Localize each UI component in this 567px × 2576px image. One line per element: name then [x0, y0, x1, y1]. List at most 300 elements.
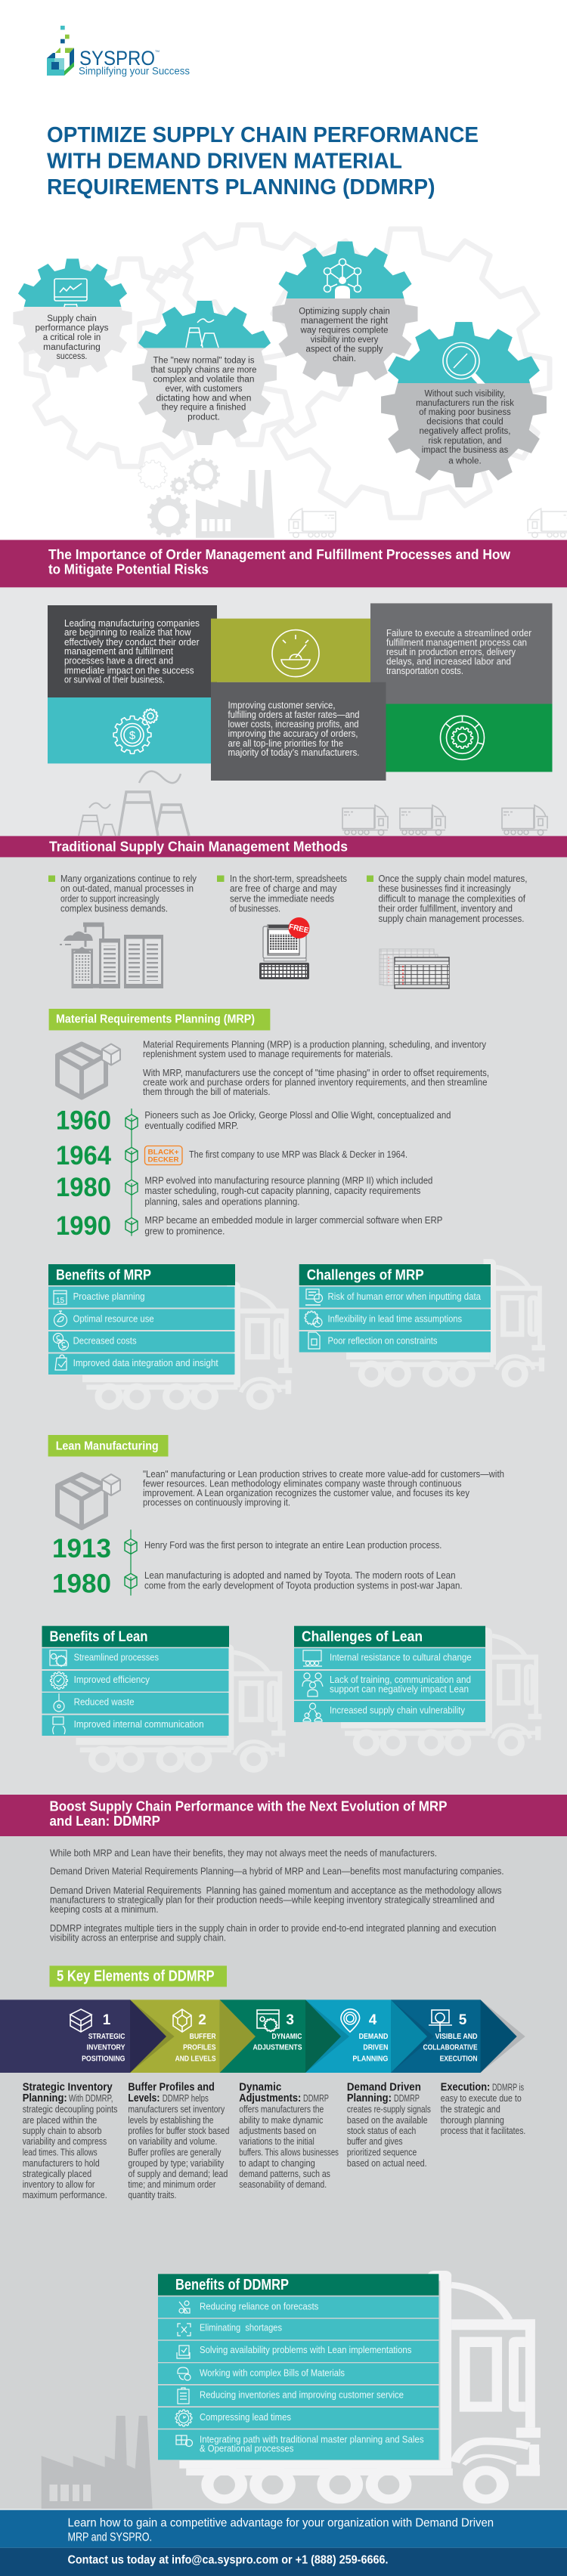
panel: benefits of lean	[42, 1626, 229, 1736]
icon: computer with free badge	[259, 917, 310, 979]
rows: Proactive planning	[73, 1291, 145, 1302]
bullet column 3: difficult to manage the complexities of	[378, 893, 525, 904]
column: dynamic adjustments: offers manufacturers the	[239, 2104, 324, 2115]
step 2	[173, 2009, 216, 2063]
gear 1 text: Supply chain	[47, 314, 97, 323]
title: REQUIREMENTS PLANNING (DDMRP)	[47, 175, 435, 199]
gear 3 text: aspect of the supply	[305, 345, 383, 354]
timeline text: eventually codified MRP.	[144, 1121, 238, 1131]
column: strategic inventory planning: lead times. This allows	[23, 2148, 98, 2158]
order card 1 text	[64, 618, 200, 685]
column: dynamic adjustments: Dynamic	[239, 2080, 281, 2093]
gear 3 text: management the right	[301, 317, 389, 326]
column: dynamic adjustments: to adapt to changing	[239, 2158, 315, 2169]
icon: monitor with chart	[54, 279, 87, 307]
rows: Poor reflection on constraints	[328, 1335, 437, 1346]
MRP description: replenishment system used to manage requirements for materials.	[143, 1049, 393, 1059]
timeline text: Lean manufacturing is adopted and named by Toyota. The modern roots of Lean	[144, 1570, 456, 1581]
column: demand driven planning: based on the available	[347, 2115, 428, 2126]
column: demand driven planning: Planning:	[347, 2092, 392, 2104]
gear 2 text: dictating how and when	[156, 394, 251, 403]
icon: x in frame	[178, 2324, 191, 2336]
DDMRP introduction: Demand Driven Material Requirements Planning has gained momentum and acceptance as the methodology allows	[50, 1885, 502, 1896]
order card 3 text: fulfillment management process can	[386, 638, 527, 648]
icon: calendar: 15	[56, 1297, 64, 1305]
step 4: 4	[369, 2012, 377, 2028]
column: buffer profiles and levels: of supply and demand; lead	[128, 2169, 228, 2179]
icon: dollar gear	[113, 709, 157, 753]
logo: black and decker: DECKER	[148, 1156, 179, 1164]
order card 1 text: immediate impact on the success	[64, 665, 194, 676]
DDMRP introduction: manufacturers to strategically plan for their production needs—while keeping inventory strategically streamlined and	[50, 1895, 494, 1906]
DDMRP introduction: While both MRP and Lean have their benefits, they may not always meet the needs of manufacturers.	[50, 1848, 437, 1858]
step 3: ADJUSTMENTS	[253, 2043, 302, 2052]
gear 3 text: way requires complete	[299, 326, 389, 335]
icon: gauge	[272, 630, 319, 677]
truck backgrounds: lean	[76, 1628, 541, 1770]
order card 1 text: Leading manufacturing companies	[64, 618, 200, 629]
bullet column 3: these businesses find it increasingly	[378, 883, 511, 894]
label: lean manufacturing: Lean Manufacturing	[56, 1440, 159, 1452]
rows	[42, 1648, 228, 1736]
column: execution: process that it facilitates.	[441, 2126, 525, 2136]
column: dynamic adjustments: demand patterns, such as	[239, 2169, 330, 2179]
step 3	[253, 2010, 302, 2052]
MRP description: Material Requirements Planning (MRP) is a production planning, scheduling, and inventory	[143, 1040, 487, 1050]
panel: order card 1	[48, 605, 217, 763]
panel: benefits of lean: Benefits of Lean	[50, 1629, 148, 1645]
icon: clipboard check	[55, 1355, 67, 1370]
column: strategic inventory planning: strategic decoupling points	[23, 2104, 118, 2115]
icon: forecast scissors	[179, 2301, 190, 2313]
column: demand driven planning: stock status of each	[347, 2126, 416, 2136]
badge: free: FREE	[288, 923, 310, 935]
rows: Optimal resource use	[73, 1313, 154, 1324]
rows: Improved internal communication	[74, 1719, 204, 1730]
heading band: traditional methods: Traditional Supply Chain Management Methods	[49, 840, 348, 855]
rows: Decreased costs	[73, 1335, 137, 1346]
lean description: improvement. A Lean organization recognizes the customer value, and focuses its key	[143, 1488, 470, 1498]
icon: document	[308, 1332, 320, 1349]
gear 1 text: success.	[57, 352, 87, 361]
logo: SYSPRO: SYSPRO	[79, 47, 155, 70]
order card 2 text: majority of today’s manufacturers.	[228, 747, 360, 758]
gear 3 text: Optimizing supply chain	[299, 307, 390, 316]
gear 2 text: The "new normal" today is	[153, 356, 255, 365]
gear 2 text: they require a finished	[162, 404, 246, 413]
gear 3 text	[299, 307, 390, 363]
icon: efficiency badge	[51, 1672, 67, 1689]
rows: Reducing reliance on forecasts	[200, 2301, 318, 2312]
icon: inbox check	[177, 2346, 190, 2358]
background gears and factory	[26, 225, 567, 538]
step 4: DEMAND	[359, 2032, 389, 2041]
gear 4 text: negatively affect profits,	[419, 427, 511, 436]
order card 3 text: Failure to execute a streamlined order	[386, 628, 531, 639]
icon: error report	[305, 1289, 322, 1305]
factory background	[42, 2416, 153, 2509]
column: execution: thorough planning	[441, 2115, 504, 2126]
rows: Integrating path with traditional master planning and Sales	[200, 2434, 424, 2445]
gear 1: supply chain performance	[13, 258, 132, 378]
bullet column 3: their order fulfillment, inventory and	[378, 904, 513, 914]
column: strategic inventory planning: maximum performance.	[23, 2190, 107, 2200]
column: execution: the strategic and	[441, 2104, 500, 2115]
bullet column 1: Many organizations continue to rely	[60, 874, 197, 884]
timeline text: come from the early development of Toyota production systems in post-war Japan.	[144, 1581, 463, 1591]
column: buffer profiles and levels: quantity traits.	[128, 2190, 176, 2200]
footer: call to action	[0, 2509, 567, 2576]
column: buffer profiles and levels	[128, 2080, 229, 2200]
heading band: traditional methods	[0, 836, 567, 857]
order card 1 text: management and fulfillment	[64, 646, 173, 657]
column: strategic inventory planning: inventory to allow for	[23, 2179, 94, 2190]
step 1: 1	[103, 2012, 111, 2028]
icon: waste wheel	[54, 1693, 64, 1712]
column: dynamic adjustments: seasonability of demand.	[239, 2179, 327, 2190]
bullet column 3	[367, 874, 528, 924]
column: demand driven planning: DDMRP	[394, 2093, 420, 2104]
step 1: STRATEGIC	[88, 2032, 125, 2041]
rows: Working with complex Bills of Materials	[200, 2367, 345, 2378]
gear 3 text: visibility into every	[311, 336, 378, 345]
timeline: MRP history: 1960	[56, 1106, 111, 1135]
DDMRP introduction: Demand Driven Material Requirements Planning—a hybrid of MRP and Lean—benefits most manufacturing companies.	[50, 1866, 503, 1877]
column: buffer profiles and levels: time; and minimum order	[128, 2179, 215, 2190]
gear 3: optimizing supply chain	[272, 241, 418, 387]
order card 3 text: delays, and increased labor and	[386, 656, 511, 666]
timeline text: grew to prominence.	[144, 1226, 225, 1236]
heading band: order management: to Mitigate Potential Risks	[48, 561, 209, 577]
footer: call to action: Contact us today at info@ca.syspro.com or +1 (888) 259-6666.	[68, 2553, 389, 2566]
panel: order card 3	[370, 603, 552, 772]
MRP description: them through the bill of materials.	[143, 1087, 271, 1097]
column: execution: easy to execute due to	[441, 2093, 522, 2104]
column: dynamic adjustments: variations to the initial	[239, 2136, 314, 2147]
column: buffer profiles and levels: profiles for buffer stock based	[128, 2126, 229, 2136]
column: buffer profiles and levels: DDMRP helps	[163, 2093, 209, 2104]
gear 2 text: product.	[187, 413, 220, 422]
MRP description: create work and purchase orders for planned inventory requirements, and then streamline	[143, 1078, 488, 1088]
lean description: processes on continuously improving it.	[143, 1498, 290, 1508]
gear 1 text: manufacturing	[43, 343, 101, 352]
bullet column 2: of businesses.	[230, 904, 280, 914]
column: strategic inventory planning: strategically placed	[23, 2169, 91, 2179]
rows: Improved efficiency	[74, 1675, 150, 1685]
step 2: BUFFER	[190, 2032, 216, 2041]
logo: SYSPRO: Simplifying your Success	[79, 65, 190, 77]
icon: clock gear	[175, 2410, 192, 2426]
heading band: order management	[0, 540, 567, 587]
label: 5 key elements	[50, 1965, 227, 1987]
heading band: boost supply chain: and Lean: DDMRP	[50, 1814, 160, 1829]
order card 3 text: result in production errors, delivery	[386, 647, 516, 657]
gear 2 text: complex and volatile than	[153, 375, 254, 384]
icon: boxes	[57, 1474, 120, 1528]
step 5: VISIBLE AND	[435, 2032, 478, 2041]
bullet column 2: In the short-term, spreadsheets	[230, 874, 347, 884]
step 2: AND LEVELS	[175, 2054, 216, 2063]
timeline text: planning, sales and operations planning.	[144, 1197, 299, 1208]
label: material requirements planning: Material Requirements Planning (MRP)	[56, 1013, 255, 1026]
gear 2 text: ever, with customers	[165, 385, 243, 394]
timeline: MRP history: 1964	[56, 1141, 111, 1170]
rows	[294, 1648, 485, 1722]
column: buffer profiles and levels: grouped by type; variability	[128, 2158, 225, 2169]
bullet column 1: order to support increasingly	[60, 893, 160, 904]
icon: network person	[324, 258, 361, 298]
rows: Streamlined processes	[74, 1653, 159, 1663]
column: demand driven planning: based on actual need.	[347, 2158, 427, 2169]
order card 2 text	[228, 700, 360, 758]
title: OPTIMIZE SUPPLY CHAIN PERFORMANCE	[47, 123, 479, 147]
column: demand driven planning: buffer and gives	[347, 2136, 403, 2147]
icon: worker helmet	[178, 2367, 191, 2380]
icon: spreadsheets	[380, 949, 449, 988]
timeline text: Pioneers such as Joe Orlicky, George Plossl and Ollie Wight, conceptualized and	[144, 1110, 451, 1121]
label: material requirements planning	[49, 1009, 270, 1031]
icon: hierarchy	[303, 1703, 322, 1721]
column: strategic inventory planning: Planning:	[23, 2092, 67, 2104]
step 5	[423, 2010, 478, 2063]
column: dynamic adjustments: Adjustments:	[239, 2092, 301, 2104]
icon: calendar	[54, 1291, 67, 1305]
step 2: PROFILES	[183, 2043, 216, 2052]
column: buffer profiles and levels: Levels:	[128, 2092, 160, 2104]
gear 1 text: a critical role in	[43, 333, 101, 342]
heading band: order management: The Importance of Order Management and Fulfillment Processes and How	[48, 547, 511, 562]
column: strategic inventory planning: are placed within the	[23, 2115, 97, 2126]
step 5: COLLABORATIVE	[423, 2043, 478, 2052]
panel: benefits of DDMRP	[158, 2274, 438, 2460]
gear 3 text: chain.	[333, 354, 356, 363]
order card 2 text: are all top-line priorities for the	[228, 738, 343, 749]
column: strategic inventory planning: manufacturers to hold	[23, 2158, 100, 2169]
gear 4 text: impact the business as	[422, 446, 508, 455]
bullet column 1: complex business demands.	[60, 904, 168, 914]
step 3: DYNAMIC	[272, 2032, 302, 2041]
step 3: 3	[286, 2012, 294, 2028]
timeline text: MRP became an embedded module in larger commercial software when ERP	[144, 1215, 442, 1226]
rows: Increased supply chain vulnerability	[330, 1705, 466, 1716]
icon: dollar gear: $	[129, 729, 136, 742]
step 4	[341, 2009, 389, 2063]
step 4: DRIVEN	[363, 2043, 388, 2052]
column: strategic inventory planning: With DDMRP,	[69, 2093, 113, 2104]
panel: challenges of MRP	[299, 1264, 491, 1353]
column: buffer profiles and levels: manufacturers set inventory	[128, 2104, 225, 2115]
logo: black and decker	[145, 1146, 182, 1165]
gear 4: without such visibility	[381, 322, 547, 487]
rows: Solving availability problems with Lean implementations	[200, 2345, 411, 2355]
lean description: fewer resources. Lean methodology eliminates company waste through continuous	[143, 1478, 461, 1489]
heading band: boost supply chain	[0, 1795, 567, 1836]
order card 2 text: fulfilling orders at faster rates—and	[228, 710, 360, 720]
icon: meeting room	[303, 1650, 322, 1666]
rows	[299, 1287, 491, 1353]
timeline text	[144, 1110, 451, 1236]
order card 2 text: improving the accuracy of orders,	[228, 728, 358, 739]
icon: clipboard list	[178, 2388, 189, 2404]
logo: SYSPRO	[47, 26, 190, 77]
column: buffer profiles and levels: levels by establishing the	[128, 2115, 213, 2126]
bullet column 3: supply chain management processes.	[378, 914, 525, 924]
bullet column 2: are free of charge and may	[230, 883, 337, 894]
icon: cooling towers	[186, 319, 218, 348]
column: strategic inventory planning: variability and compress	[23, 2136, 107, 2147]
column: strategic inventory planning: supply chain to absorb	[23, 2126, 102, 2136]
rows	[48, 1287, 234, 1375]
gear 4 text: risk reputation, and	[428, 437, 502, 446]
rows: Eliminating shortages	[200, 2323, 282, 2333]
gear 4 text: a whole.	[448, 456, 482, 465]
label: lean manufacturing	[48, 1435, 168, 1457]
rows: Internal resistance to cultural change	[330, 1653, 472, 1663]
lean description: "Lean" manufacturing or Lean production strives to create more value-add for customers—with	[143, 1469, 504, 1480]
timeline: MRP history: 1990	[56, 1211, 111, 1241]
icon: communication	[53, 1717, 65, 1734]
lean description	[143, 1469, 504, 1508]
column: demand driven planning: Demand Driven	[347, 2080, 421, 2093]
gear 4 text: Without such visibility,	[425, 389, 505, 398]
column: execution: DDMRP is	[492, 2082, 524, 2092]
timeline: MRP history	[56, 1106, 451, 1241]
rows: Reduced waste	[74, 1697, 135, 1708]
order card 1 text: effectively they conduct their order	[64, 637, 200, 648]
icon: people group	[302, 1673, 323, 1696]
icon: process gears	[50, 1650, 67, 1666]
step 2: 2	[198, 2012, 206, 2028]
column: dynamic adjustments: DDMRP	[303, 2093, 329, 2104]
rows: & Operational processes	[200, 2444, 293, 2454]
column: strategic inventory planning	[23, 2080, 118, 2200]
column: dynamic adjustments: ability to make dynamic	[239, 2115, 323, 2126]
logo: black and decker: BLACK+	[148, 1149, 179, 1156]
gear 2 text: that supply chains are more	[151, 366, 257, 375]
bullet column 1: on out-dated, manual processes in	[60, 883, 194, 894]
title	[47, 123, 479, 199]
footer: call to action: Learn how to gain a competitive advantage for your organization with Demand Driven	[68, 2516, 494, 2529]
rows: Inflexibility in lead time assumptions	[328, 1313, 462, 1324]
icon: magnifier	[443, 343, 484, 383]
truck backgrounds: MRP	[82, 1259, 545, 1407]
order card 3 text: transportation costs.	[386, 666, 463, 676]
column: buffer profiles and levels: on variability and volume.	[128, 2136, 217, 2147]
DDMRP introduction: keeping costs at a minimum.	[50, 1904, 159, 1915]
gear 4 text	[416, 389, 514, 465]
column: execution: Execution:	[441, 2080, 490, 2093]
panel: benefits of MRP	[48, 1264, 235, 1375]
panel: order card 2	[211, 619, 386, 781]
gear 1 text: performance plays	[35, 323, 109, 332]
column: dynamic adjustments: buffers. This allows businesses	[239, 2148, 339, 2158]
icon: boxes	[57, 1044, 120, 1097]
bullet column 3: Once the supply chain model matures,	[378, 874, 528, 884]
step 4: PLANNING	[352, 2054, 388, 2063]
icon: office buildings	[60, 923, 163, 988]
heading band: boost supply chain: Boost Supply Chain Performance with the Next Evolution of MRP	[50, 1799, 448, 1814]
label: 5 key elements: 5 Key Elements of DDMRP	[57, 1968, 215, 1984]
rows: Reducing inventories and improving customer service	[200, 2390, 404, 2401]
timeline: MRP history: 1980	[56, 1173, 111, 1202]
gear 2: the new normal	[132, 301, 277, 445]
order card 1 text: or survival of their business.	[64, 675, 165, 685]
step 1	[70, 2009, 125, 2063]
timeline: lean history: 1913	[52, 1534, 111, 1563]
order card 3 text	[386, 628, 531, 676]
decorative towers and trucks	[79, 772, 547, 836]
MRP description: With MRP, manufacturers use the concept of "time phasing" in order to offset requirements,	[143, 1068, 489, 1078]
column: dynamic adjustments: adjustments based on	[239, 2126, 316, 2136]
gear 4 text: decisions that could	[426, 417, 503, 426]
logo: SYSPRO: TM	[155, 49, 160, 53]
bullet column 1	[48, 874, 197, 914]
timeline text: Henry Ford was the first person to integrate an entire Lean production process.	[144, 1540, 442, 1551]
truck background: DDMRP	[179, 2271, 541, 2499]
order card 2 text: lower costs, increasing profits, and	[228, 719, 359, 730]
timeline: lean history: 1980	[52, 1569, 111, 1599]
column: strategic inventory planning: Strategic Inventory	[23, 2080, 113, 2093]
icon: gears and clock	[305, 1311, 322, 1327]
timeline text: master scheduling, rough-cut capacity planning, capacity requirements	[144, 1186, 420, 1196]
panel: challenges of lean: Challenges of Lean	[302, 1629, 423, 1645]
panel: challenges of MRP: Challenges of MRP	[307, 1267, 424, 1283]
panel: benefits of MRP: Benefits of MRP	[56, 1267, 151, 1283]
order card 1 text: processes have a direct and	[64, 656, 173, 666]
rows: support can negatively impact Lean	[330, 1684, 469, 1695]
bullet column 2	[217, 874, 347, 914]
step 5: 5	[459, 2012, 467, 2028]
column: buffer profiles and levels: Buffer Profiles and	[128, 2080, 215, 2093]
column: demand driven planning: prioritized sequence	[347, 2148, 417, 2158]
timeline text: The first company to use MRP was Black & Decker in 1964.	[189, 1149, 407, 1160]
footer: call to action: MRP and SYSPRO.	[68, 2531, 152, 2544]
icon: gear in circle	[440, 716, 484, 759]
step 5: EXECUTION	[440, 2054, 478, 2063]
rows	[158, 2296, 438, 2460]
gear 4 text: of making poor business	[419, 408, 511, 417]
column: demand driven planning	[347, 2080, 431, 2169]
icon: coins	[53, 1333, 68, 1350]
column: dynamic adjustments	[239, 2080, 339, 2190]
icon: stopwatch	[54, 1311, 67, 1327]
timeline text: MRP evolved into manufacturing resource planning (MRP II) which included	[144, 1175, 432, 1186]
step 1: INVENTORY	[86, 2043, 125, 2052]
bullet column 2: serve the immediate needs	[230, 893, 334, 904]
rows: Risk of human error when inputting data	[328, 1291, 481, 1302]
column: demand driven planning: creates re-supply signals	[347, 2104, 431, 2115]
DDMRP introduction: DDMRP integrates multiple tiers in the supply chain in order to provide end-to-end integrated planning and execution	[50, 1923, 496, 1934]
column: execution	[441, 2080, 525, 2136]
rows: Improved data integration and insight	[73, 1358, 218, 1368]
icon: integration	[176, 2435, 192, 2447]
rows: Lack of training, communication and	[330, 1675, 471, 1685]
MRP description	[143, 1040, 489, 1097]
timeline text	[144, 1540, 463, 1591]
timeline: lean history	[52, 1529, 463, 1599]
step 1: POSITIONING	[82, 2054, 125, 2063]
panel: benefits of DDMRP: Benefits of DDMRP	[175, 2277, 289, 2293]
gear 4 text: manufacturers run the risk	[416, 399, 514, 408]
DDMRP introduction: visibility across an enterprise and supply chain.	[50, 1933, 226, 1944]
column: buffer profiles and levels: Buffer profiles are generally	[128, 2148, 222, 2158]
panel: challenges of lean	[294, 1626, 485, 1722]
rows: Compressing lead times	[200, 2412, 291, 2423]
title: WITH DEMAND DRIVEN MATERIAL	[47, 150, 402, 174]
gear 1 text	[35, 314, 109, 361]
chevron process: 5 key elements	[0, 1999, 525, 2073]
DDMRP introduction	[50, 1848, 503, 1944]
